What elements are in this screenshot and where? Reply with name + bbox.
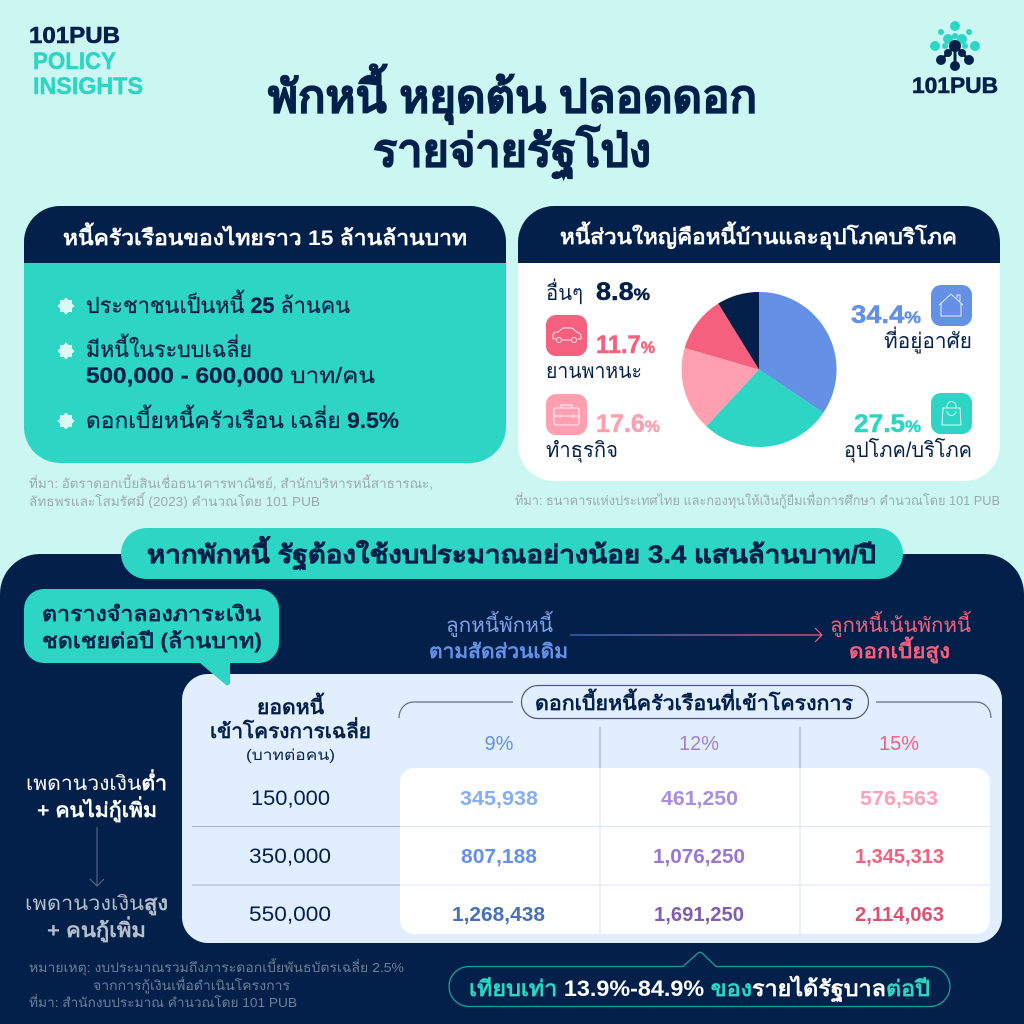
callout: simulation table: ตารางจำลองภาระเงิน <box>42 603 262 626</box>
label: others: อื่นๆ <box>546 278 583 305</box>
logo: 101PUB Policy Insights <box>29 22 143 100</box>
label: housing: 34.4 % <box>851 301 921 329</box>
logo: 101PUB Policy Insights: POLICY <box>33 48 116 75</box>
label: business: 17.6% <box>596 410 660 438</box>
icon: shopping bag <box>931 393 972 434</box>
title <box>268 63 757 180</box>
logo: 101PUB Policy Insights: 101PUB <box>29 22 120 48</box>
row values: 350,000: 1,345,313 <box>855 846 944 868</box>
pie chart <box>682 292 837 447</box>
icon: house <box>931 285 972 326</box>
label: business: ทำธุรกิจ <box>546 439 618 463</box>
row values: 350,000: 807,188 <box>461 846 537 868</box>
title: พักหนี้ หยุดต้น ปลอดดอก <box>268 63 757 125</box>
row values: 150,000 <box>460 788 938 810</box>
row values: 150,000: 345,938 <box>460 788 538 810</box>
debtor behaviour scale: ลูกหนี้พักหนี้ <box>446 611 553 638</box>
row values: 550,000: 2,114,063 <box>855 904 944 926</box>
debtor behaviour scale: ลูกหนี้เน้นพักหนี้ <box>830 611 971 638</box>
row labels: 350,000 <box>249 845 331 868</box>
label: consumption: 27.5% <box>854 410 921 438</box>
table header: debt per person: เข้าโครงการเฉลี่ย <box>210 716 371 743</box>
side label: low limit: + คนไม่กู้เพิ่ม <box>37 795 157 824</box>
source: household debt: ลัทธพรและโสมรัศมิ์ (2023) คำนวณโดย 101 PUB <box>29 492 320 509</box>
label: others: 8.8% <box>596 278 650 306</box>
panel header: debt composition: หนี้ส่วนใหญ่คือหนี้บ้านและอุปโภคบริโภค <box>560 221 957 251</box>
column headers: 9% <box>485 733 514 755</box>
table header: debt per person: ยอดหนี้ <box>257 692 325 719</box>
label: business <box>546 394 660 463</box>
label: vehicles: ยานพาหนะ <box>546 360 642 383</box>
debtor behaviour scale <box>429 611 971 665</box>
bullet: people in debt: ประชาชนเป็นหนี้ 25 ล้านคน <box>86 290 350 318</box>
label: vehicles <box>546 315 655 383</box>
label: housing: ที่อยู่อาศัย <box>884 326 972 354</box>
logo: 101PUB network mark <box>912 21 998 98</box>
callout: share of government revenue: เทียบเท่า 13.9%-84.9% ของรายได้รัฐบาล ต่อปี <box>469 975 930 1003</box>
table header: debt per person: (บาทต่อคน) <box>246 747 335 764</box>
callout: share of government revenue <box>449 952 950 1006</box>
source: household debt <box>29 474 433 509</box>
panel header: household debt <box>24 206 506 263</box>
table header: interest rate: ดอกเบี้ยหนี้ครัวเรือนที่เข้าโครงการ <box>535 688 853 715</box>
row labels <box>249 787 331 926</box>
bullet: average interest: ดอกเบี้ยหนี้ครัวเรือน เฉลี่ย 9.5% <box>86 405 399 433</box>
row values: 550,000: 1,691,250 <box>654 904 744 926</box>
debtor behaviour scale: ตามสัดส่วนเดิม <box>429 641 568 663</box>
footnote and source: ที่มา: สำนักงบประมาณ คำนวณโดย 101 PUB <box>29 994 297 1010</box>
side label: high limit: + คนกู้เพิ่ม <box>47 915 146 944</box>
title: รายจ่ายรัฐโป่ง <box>373 124 651 180</box>
table header: interest rate <box>522 686 868 718</box>
footnote and source <box>29 958 404 1010</box>
row labels: 150,000 <box>251 787 330 810</box>
table header: debt per person <box>210 692 371 764</box>
row values: 150,000: 461,250 <box>661 788 738 810</box>
source: debt composition: ที่มา: ธนาคารแห่งประเทศไทย และกองทุนให้เงินกู้ยืมเพื่อการศึกษา คำนวณโดย 101 PUB <box>515 492 1000 509</box>
panel: household debt <box>24 206 506 463</box>
side label: low limit <box>26 768 167 824</box>
footnote and source: หมายเหตุ: งบประมาณรวมถึงภาระดอกเบี้ยพันธบัตรเฉลี่ย 2.5% <box>29 958 404 976</box>
label: consumption <box>844 393 972 463</box>
bullet: average debt <box>58 334 375 388</box>
icon: briefcase <box>546 394 587 435</box>
row values: 350,000: 1,076,250 <box>653 846 745 868</box>
logo: 101PUB network mark: 101PUB <box>912 73 998 98</box>
column headers: 12% <box>679 733 719 755</box>
bullet: average debt: มีหนี้ในระบบเฉลี่ย <box>86 334 252 362</box>
arrow: low to high <box>90 827 104 886</box>
logo: 101PUB Policy Insights: INSIGHTS <box>33 73 143 100</box>
row values: 350,000 <box>461 846 944 868</box>
column headers <box>485 733 919 755</box>
bullet: average debt: 500,000 - 600,000 บาท/คน <box>86 363 375 388</box>
column headers: 15% <box>879 733 919 755</box>
heading pill: budget required: หากพักหนี้ รัฐต้องใช้งบประมาณอย่างน้อย 3.4 แสนล้านบาท/ปี <box>147 535 876 571</box>
label: vehicles: 11.7% <box>596 331 655 359</box>
table <box>182 674 1002 943</box>
icon: car <box>546 315 587 356</box>
panel header: household debt: หนี้ครัวเรือนของไทยราว 15 ล้านล้านบาท <box>63 222 467 250</box>
row values: 550,000: 1,268,438 <box>452 904 545 926</box>
label: housing <box>851 285 972 354</box>
footnote and source: จากการกู้เงินเพื่อดำเนินโครงการ <box>93 977 290 994</box>
side label: high limit: เพดานวงเงิน สูง <box>25 893 168 917</box>
callout: simulation table <box>24 589 279 685</box>
debtor behaviour scale: ดอกเบี้ยสูง <box>849 636 950 665</box>
side label: low limit: เพดานวงเงิน ต่ำ <box>26 768 167 795</box>
heading pill: budget required <box>121 528 903 579</box>
source: household debt: ที่มา: อัตราดอกเบี้ยสินเชื่อธนาคารพาณิชย์, สำนักบริหารหนี้สาธารณะ, <box>29 474 433 491</box>
panel header: debt composition <box>518 206 1000 263</box>
callout: simulation table: ชดเชยต่อปี (ล้านบาท) <box>42 629 262 653</box>
panel: budget simulation <box>0 528 1024 1024</box>
side label: high limit <box>25 893 168 944</box>
panel: debt composition <box>518 206 1000 481</box>
row values: 550,000 <box>452 904 944 926</box>
label: others <box>546 278 650 306</box>
label: consumption: อุปโภค/บริโภค <box>844 438 972 463</box>
row values: 150,000: 576,563 <box>860 788 938 810</box>
row labels: 550,000 <box>249 903 331 926</box>
